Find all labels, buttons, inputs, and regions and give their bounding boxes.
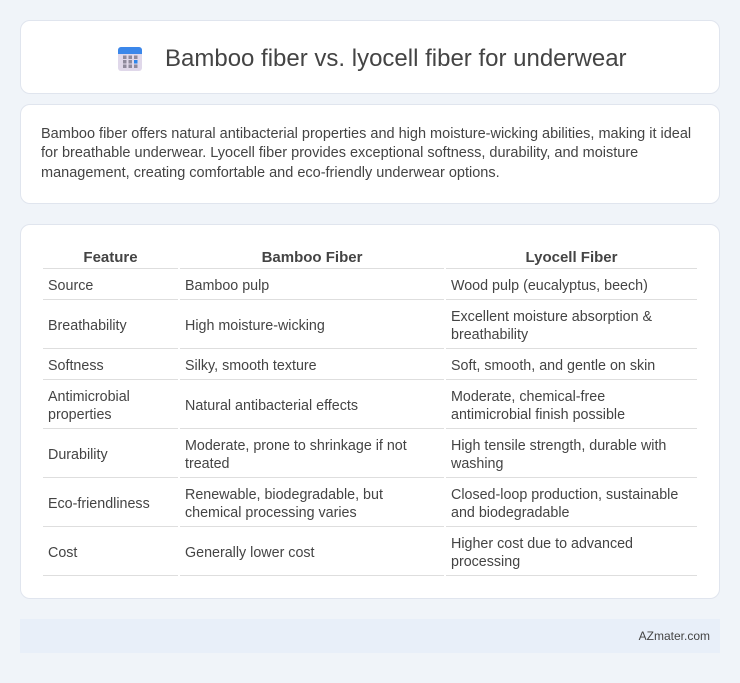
row: Cost: processing bbox=[451, 554, 520, 570]
row: Eco-friendliness bbox=[48, 487, 678, 521]
row: Softness: Soft, smooth, and gentle on skin bbox=[451, 358, 655, 374]
row: Softness: Softness bbox=[48, 358, 104, 374]
footer text: AZmater.com bbox=[639, 629, 710, 643]
row: Antimicrobial properties: antimicrobial finish possible bbox=[451, 407, 625, 423]
row: Breathability: High moisture-wicking bbox=[185, 318, 325, 334]
row: Softness bbox=[48, 358, 655, 374]
table header bbox=[83, 249, 618, 266]
row: Antimicrobial properties: Natural antibacterial effects bbox=[185, 398, 358, 414]
title card bbox=[20, 20, 720, 94]
row: Breathability: Breathability bbox=[48, 318, 127, 334]
row: Eco-friendliness: Eco-friendliness bbox=[48, 496, 150, 512]
row: Antimicrobial properties: Moderate, chemical-free bbox=[451, 389, 605, 405]
row: Antimicrobial properties bbox=[48, 389, 625, 423]
row: Durability: Durability bbox=[48, 447, 108, 463]
summary text: management, creating comfortable and eco-friendly underwear options. bbox=[41, 164, 500, 180]
row: Cost: Generally lower cost bbox=[185, 545, 315, 561]
table header: Bamboo Fiber bbox=[262, 249, 362, 266]
row: Durability: Moderate, prone to shrinkage if not bbox=[185, 438, 407, 454]
row: Source: Wood pulp (eucalyptus, beech) bbox=[451, 278, 648, 294]
row: Eco-friendliness: chemical processing varies bbox=[185, 505, 357, 521]
row: Antimicrobial properties: Antimicrobial bbox=[48, 389, 130, 405]
icon: calendar bbox=[118, 47, 142, 71]
table header: Feature bbox=[83, 249, 138, 266]
panel: summary bbox=[20, 104, 720, 204]
summary text: for breathable underwear. Lyocell fiber provides exceptional softness, durability, and moisture bbox=[41, 145, 638, 161]
row: Softness: Silky, smooth texture bbox=[185, 358, 317, 374]
footer bar bbox=[20, 619, 720, 653]
row: Source: Source bbox=[48, 278, 93, 294]
table header: Lyocell Fiber bbox=[526, 249, 617, 266]
row: Durability: washing bbox=[451, 456, 503, 472]
row: Eco-friendliness: and biodegradable bbox=[451, 505, 569, 521]
row: Breathability bbox=[48, 309, 652, 343]
row: Durability: High tensile strength, durable with bbox=[451, 438, 666, 454]
row: Eco-friendliness: Renewable, biodegradable, but bbox=[185, 487, 383, 503]
row: Source bbox=[48, 278, 648, 294]
title: Bamboo fiber vs. lyocell fiber for underwear bbox=[165, 45, 627, 72]
row: Antimicrobial properties: properties bbox=[48, 407, 112, 423]
row: Eco-friendliness: Closed-loop production, sustainable bbox=[451, 487, 678, 503]
row: Cost: Higher cost due to advanced bbox=[451, 536, 633, 552]
row: Cost: Cost bbox=[48, 545, 77, 561]
panel: comparison table bbox=[20, 224, 720, 599]
row: Cost bbox=[48, 536, 633, 570]
row: Durability bbox=[48, 438, 666, 472]
row: Source: Bamboo pulp bbox=[185, 278, 269, 294]
summary text bbox=[41, 126, 691, 180]
summary text: Bamboo fiber offers natural antibacterial properties and high moisture-wicking abilities, making it ideal bbox=[41, 126, 691, 142]
row: Breathability: Excellent moisture absorption & bbox=[451, 309, 652, 325]
row: Durability: treated bbox=[185, 456, 230, 472]
row: Breathability: breathability bbox=[451, 327, 528, 343]
